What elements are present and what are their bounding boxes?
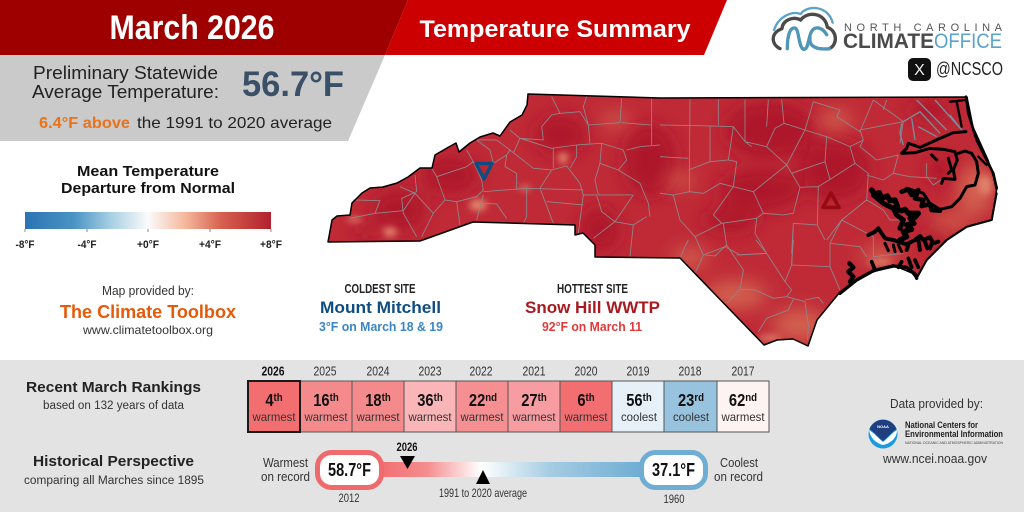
- marker: 2026: [396, 442, 418, 469]
- panel: statewide average: [0, 55, 385, 141]
- ranking labels: rd: [694, 391, 704, 404]
- callout: coldest site: 3°F on March 18 & 19: [319, 320, 443, 334]
- ranking labels: th: [643, 391, 652, 404]
- ranking labels: 22: [469, 391, 485, 410]
- coolest record pill: 37.1°F: [652, 460, 695, 480]
- rankings table: warmest: [356, 410, 400, 424]
- ranking cells: [248, 381, 769, 432]
- map credit: [60, 283, 236, 337]
- legend: mean temperature departure: -4°F: [78, 239, 97, 251]
- panel: bottom band: [0, 360, 1024, 512]
- rankings table: warmest: [512, 410, 556, 424]
- ranking labels: 62: [729, 391, 745, 410]
- callout: hottest site: 92°F on March 11: [542, 320, 642, 334]
- rankings table: warmest: [408, 410, 452, 424]
- data credit: NOAA NCEI: Environmental Information: [905, 429, 1003, 439]
- icon: NOAA logo: NOAA: [877, 424, 889, 429]
- years row: 2020: [574, 364, 598, 378]
- rankings table: warmest: [460, 410, 504, 424]
- icon: coldest site marker: [476, 164, 492, 179]
- state outline: [328, 94, 997, 346]
- ranking labels: 36: [417, 391, 434, 410]
- warmest record pill: on record: [261, 469, 310, 484]
- rankings table: warmest: [252, 410, 296, 424]
- ranking labels: th: [586, 391, 595, 404]
- map: North Carolina temperature departure: [320, 90, 1010, 350]
- ranking labels: 23: [678, 391, 694, 410]
- years row: 2026: [262, 364, 285, 378]
- legend: mean temperature departure: -8°F: [16, 239, 35, 251]
- years row: 2017: [732, 364, 755, 378]
- logo: NC Climate Office: [773, 8, 1003, 53]
- heading: recent rankings: [26, 379, 201, 412]
- ranking labels: th: [382, 391, 391, 404]
- ranking labels: nd: [745, 391, 757, 404]
- years row: 2021: [522, 364, 546, 378]
- heading: recent rankings: Recent March Rankings: [26, 379, 201, 396]
- rankings table: coolest: [621, 410, 658, 424]
- years row: 2018: [678, 364, 702, 378]
- logo: NC Climate Office: CLIMATE: [843, 30, 934, 53]
- years row: 2024: [366, 364, 390, 378]
- heading: recent rankings: based on 132 years of data: [43, 400, 185, 412]
- coolest record pill: 1960: [664, 492, 685, 506]
- callout: hottest site: HOTTEST SITE: [557, 282, 628, 296]
- legend: mean temperature departure: Mean Temperature: [77, 163, 219, 180]
- rankings table: warmest: [721, 410, 765, 424]
- legend: mean temperature departure: +4°F: [199, 239, 221, 251]
- panel: statewide average: 56.7°F: [242, 65, 344, 104]
- ranking labels: th: [330, 391, 339, 404]
- rankings table: coolest: [673, 410, 710, 424]
- years row: [262, 364, 755, 378]
- heading: historical perspective: Historical Perspective: [33, 453, 194, 470]
- rankings table: warmest: [304, 410, 348, 424]
- coolest record pill: Coolest: [720, 455, 758, 470]
- panel: statewide average: Preliminary Statewide: [33, 62, 218, 83]
- rankings table: [248, 364, 769, 432]
- ranking labels: 18: [365, 391, 382, 410]
- ranking labels: th: [274, 391, 283, 404]
- legend: mean temperature departure: [16, 163, 282, 251]
- heading: historical perspective: [24, 453, 204, 487]
- years row: 2019: [626, 364, 650, 378]
- callout: hottest site: [525, 282, 660, 334]
- warmest record pill: [261, 452, 382, 505]
- ranking labels: 27: [521, 391, 538, 410]
- map credit: Map provided by:: [102, 283, 194, 298]
- marker: 1991 to 2020 average: [439, 470, 527, 500]
- map credit: www.climatetoolbox.org: [82, 323, 213, 337]
- years row: 2022: [470, 364, 493, 378]
- legend: mean temperature departure: +8°F: [260, 239, 282, 251]
- data credit: NOAA NCEI: Data provided by:: [890, 397, 983, 411]
- callout: coldest site: COLDEST SITE: [344, 282, 416, 296]
- coolest record pill: on record: [714, 469, 763, 484]
- heading: historical perspective: comparing all Marches since 1895: [24, 475, 204, 487]
- ranking labels: th: [434, 391, 443, 404]
- callout: hottest site: Snow Hill WWTP: [525, 298, 660, 317]
- ranking labels: [265, 391, 757, 410]
- ranking labels: th: [538, 391, 547, 404]
- years row: 2023: [418, 364, 442, 378]
- ranking labels: 6: [577, 391, 586, 410]
- legend: mean temperature departure: +0°F: [137, 239, 159, 251]
- data credit: NOAA NCEI: NATIONAL OCEANIC AND ATMOSPHERIC ADMINISTRATION: [905, 441, 1003, 445]
- header: month banner: [0, 0, 408, 55]
- county boundaries: [350, 97, 963, 340]
- warmest record pill: 58.7°F: [328, 460, 371, 480]
- years row: 2025: [314, 364, 337, 378]
- ranking labels: 56: [626, 391, 643, 410]
- warmest record pill: Warmest: [263, 455, 308, 470]
- ranking labels: nd: [485, 391, 497, 404]
- sounds and estuaries: [840, 97, 997, 293]
- social handle: @NCSCO: [936, 59, 1003, 79]
- warmest record pill: 2012: [338, 491, 360, 505]
- logo: NC Climate Office: OFFICE: [934, 30, 1002, 53]
- map credit: The Climate Toolbox: [60, 302, 236, 322]
- logo: NC Climate Office: NORTH CAROLINA: [844, 22, 1003, 34]
- rankings table: warmest: [564, 410, 608, 424]
- data credit: NOAA NCEI: [868, 397, 1003, 466]
- panel: statewide average: the 1991 to 2020 average: [137, 115, 332, 132]
- social handle: X: [914, 62, 925, 79]
- coolest record pill: [642, 452, 763, 506]
- data credit: NOAA NCEI: www.ncei.noaa.gov: [882, 452, 988, 466]
- callout: coldest site: [319, 282, 443, 334]
- ranking labels: 4: [265, 391, 274, 410]
- data credit: NOAA NCEI: National Centers for: [905, 420, 978, 430]
- header: temperature summary banner: [385, 0, 727, 55]
- ranking labels: 16: [313, 391, 330, 410]
- icon: hottest site marker: [823, 193, 839, 208]
- social handle: [908, 58, 1003, 81]
- marker: 2026: 2026: [396, 442, 418, 454]
- chart: historical temperature range: [261, 442, 763, 506]
- callout: coldest site: Mount Mitchell: [320, 298, 441, 317]
- icon: cloud: [773, 8, 835, 49]
- header: temperature summary banner: Temperature Summary: [420, 16, 691, 43]
- legend: mean temperature departure: Departure from Normal: [61, 180, 235, 197]
- marker: 1991 to 2020 average: 1991 to 2020 average: [439, 486, 527, 500]
- panel: statewide average: 6.4°F above: [39, 115, 130, 132]
- header: month banner: March 2026: [110, 9, 274, 47]
- panel: statewide average: Average Temperature:: [32, 81, 219, 102]
